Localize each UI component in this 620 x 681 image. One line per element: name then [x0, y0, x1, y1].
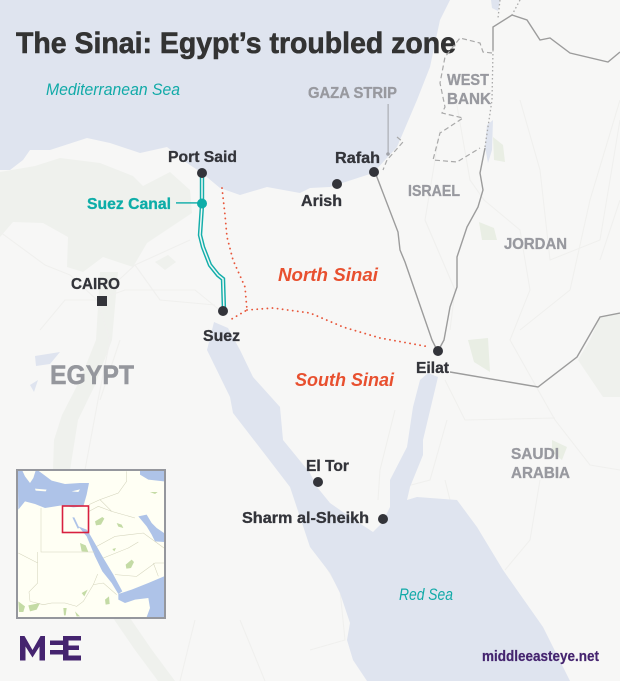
Suez Canal route	[200, 173, 224, 311]
city: Suez: Suez	[203, 328, 240, 345]
inset: green patches	[18, 492, 158, 616]
title: The Sinai: Egypt’s troubled zone	[16, 27, 456, 60]
green vegetation	[0, 158, 620, 681]
city: Sharm al-Sheikh: Sharm al-Sheikh	[242, 510, 369, 527]
label: Jordan: JORDAN	[504, 236, 567, 253]
label: West Bank	[447, 72, 491, 108]
label: Saudi Arabia	[511, 446, 570, 482]
label: West Bank: BANK	[447, 91, 491, 108]
inset: seas	[18, 471, 164, 617]
label: Gaza Strip with leader	[308, 85, 397, 156]
label: Mediterranean Sea: Mediterranean Sea	[46, 81, 180, 99]
city: Eilat	[416, 346, 450, 377]
Sinai governorate boundary	[222, 188, 430, 347]
inset: red locator box	[62, 506, 88, 532]
lake and Dead Sea	[30, 0, 500, 392]
label: West Bank: WEST	[447, 72, 489, 89]
label: Saudi Arabia: ARABIA	[511, 465, 570, 482]
city: Arish	[301, 179, 342, 210]
inset: grey frame	[17, 470, 165, 618]
disputed dashed borders	[383, 38, 492, 170]
inset: islands and Greek land	[22, 471, 80, 492]
label: Saudi Arabia: SAUDI	[511, 446, 559, 463]
label: Israel: ISRAEL	[408, 183, 460, 200]
inset locator map	[17, 470, 165, 618]
city: El Tor	[306, 458, 349, 487]
city: Arish: Arish	[301, 193, 342, 210]
website credit: middleeasteye.net	[482, 649, 599, 665]
sea: Mediterranean	[0, 0, 450, 195]
sea: Gulf of Suez, Red Sea and Gulf of Aqaba	[207, 322, 570, 681]
label: Gaza Strip with leader: GAZA STRIP	[308, 85, 397, 102]
label: Suez Canal with leader and dot: Suez Canal	[87, 196, 171, 213]
city: El Tor: El Tor	[306, 458, 349, 475]
MEE logo	[20, 636, 81, 660]
borders	[375, 15, 620, 387]
label: Egypt: EGYPT	[50, 360, 134, 390]
pale green patches	[468, 137, 567, 460]
city: Rafah	[335, 150, 380, 177]
city: Rafah: Rafah	[335, 150, 380, 167]
city: Eilat: Eilat	[416, 360, 450, 377]
city: Cairo: CAIRO	[71, 276, 120, 293]
city: Port Said	[168, 149, 237, 178]
dotted Jordan river border	[485, 0, 520, 147]
label: South Sinai: South Sinai	[295, 370, 395, 390]
city: Cairo	[71, 276, 120, 306]
label: North Sinai: North Sinai	[278, 265, 379, 285]
city: Port Said: Port Said	[168, 149, 237, 166]
label: Red Sea: Red Sea	[399, 586, 453, 604]
city: Suez	[203, 306, 240, 345]
inset: country borders	[18, 471, 164, 606]
